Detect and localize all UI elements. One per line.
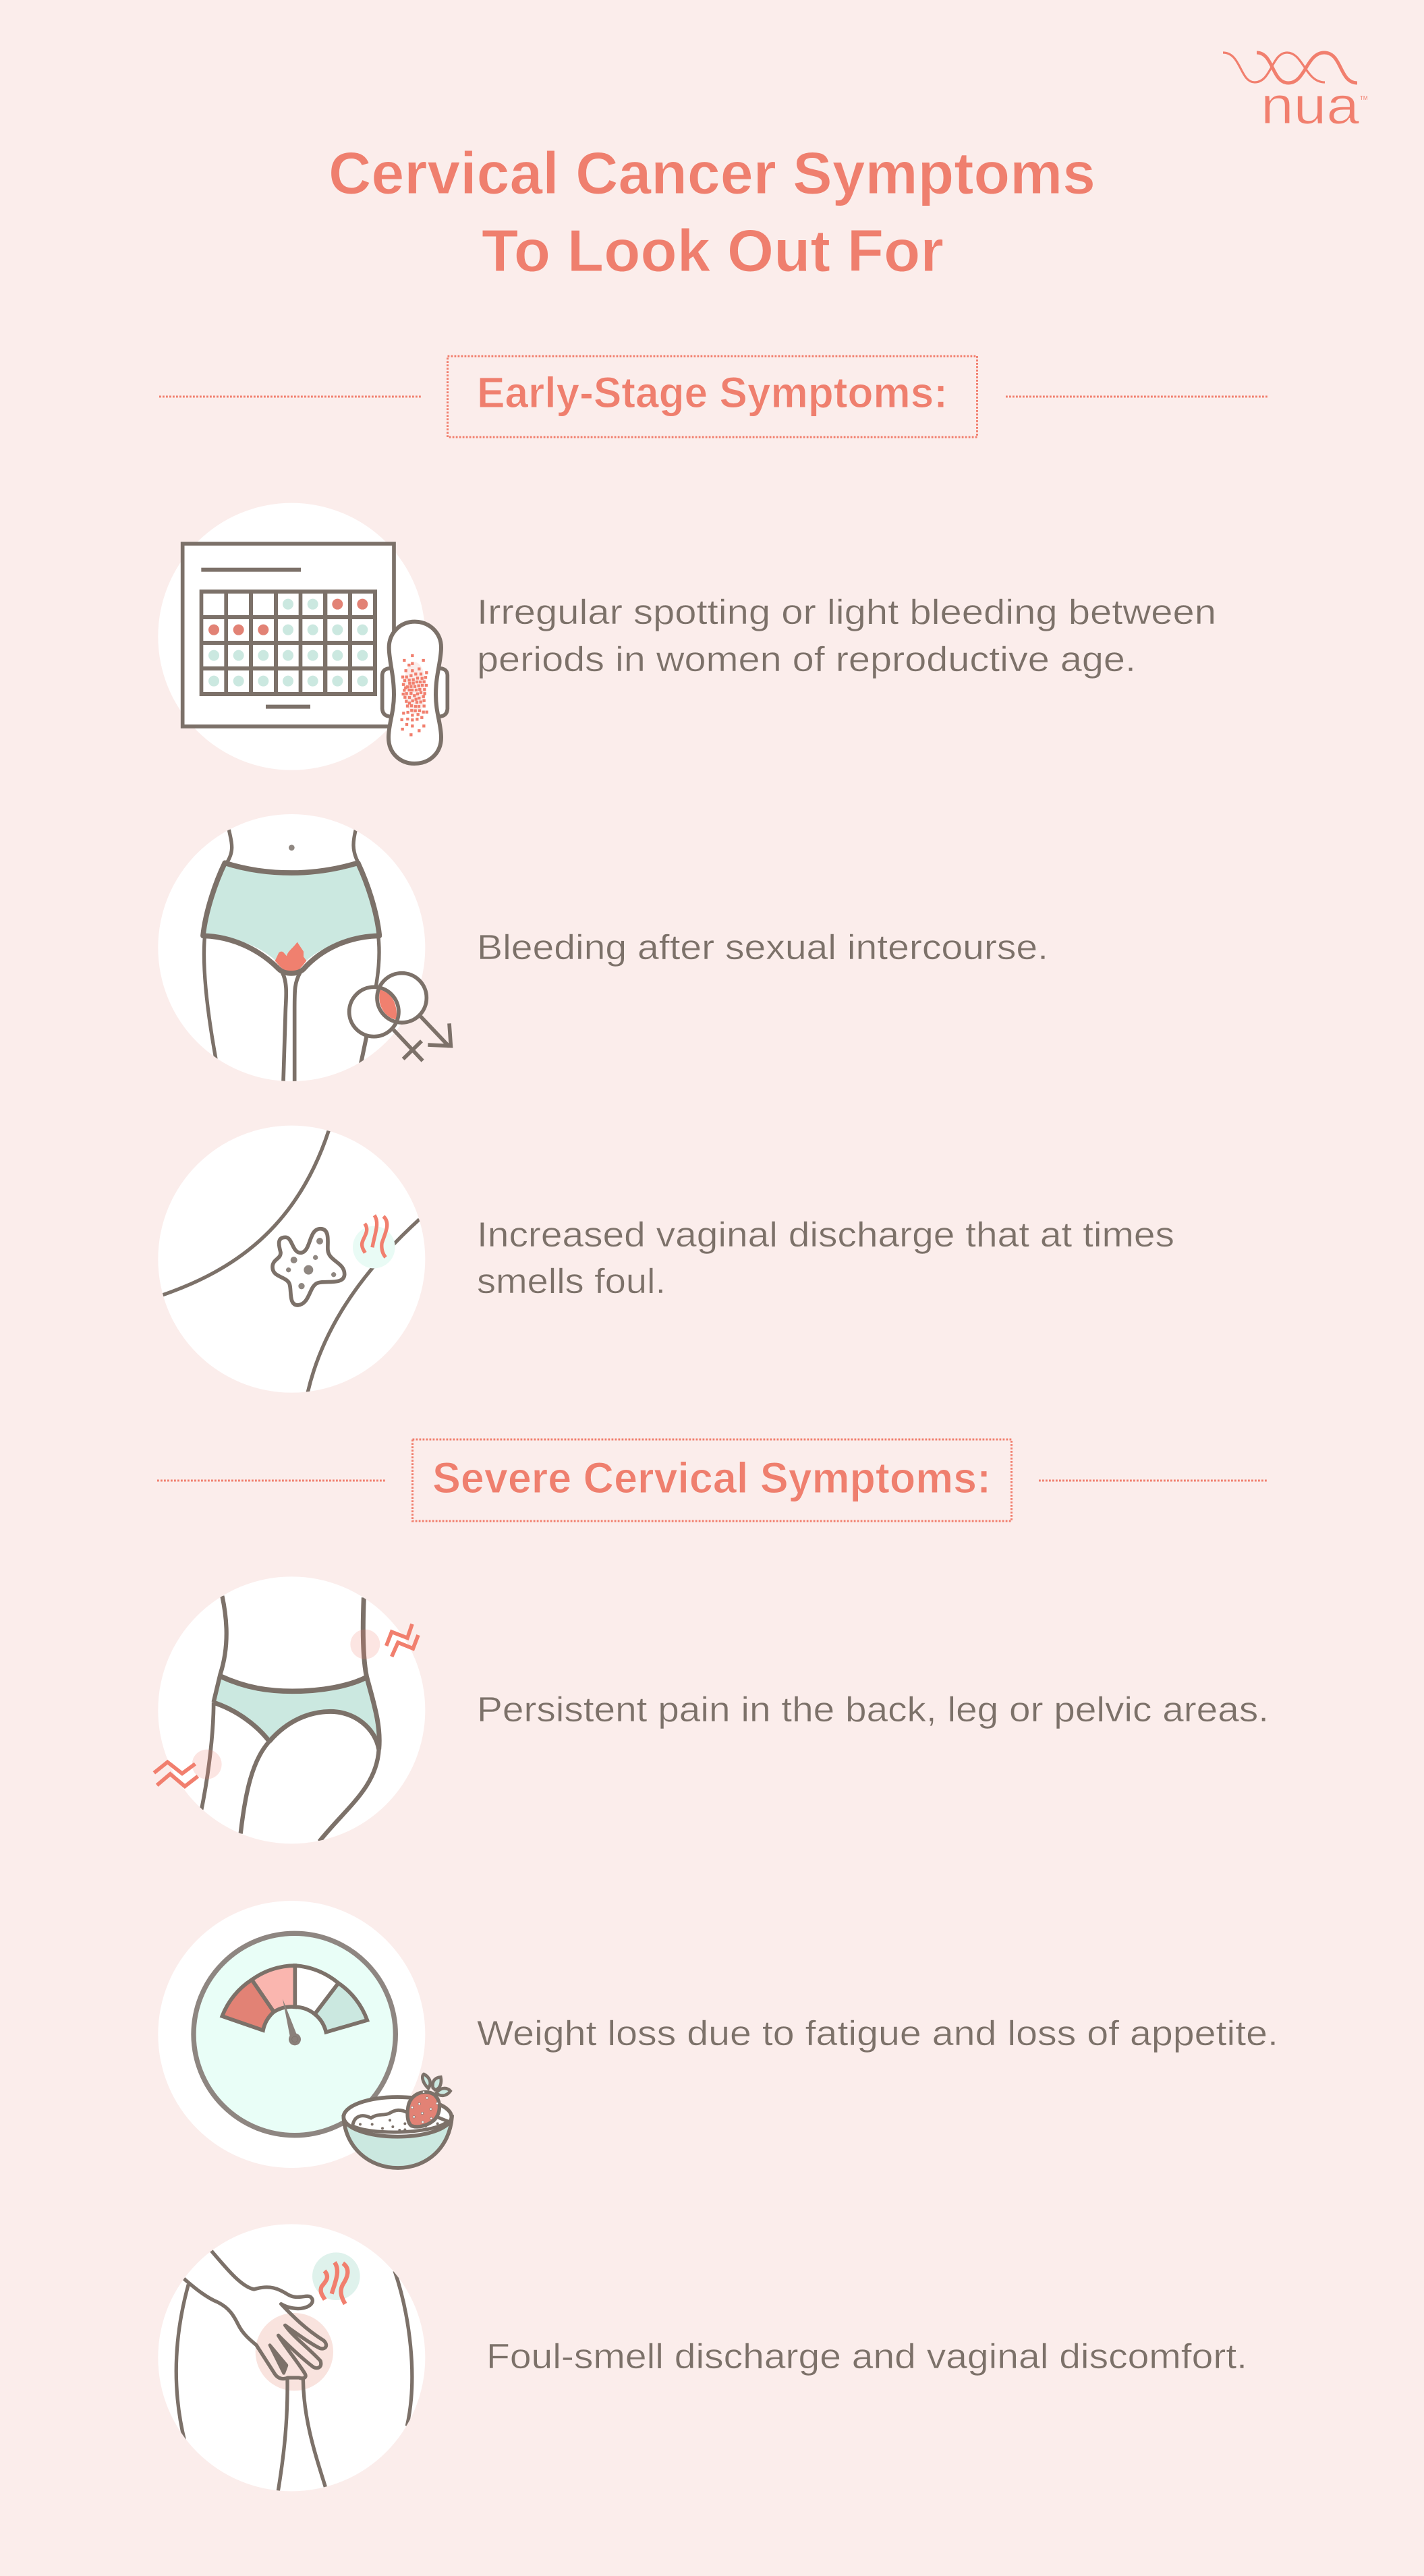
section heading: severe cervical symptoms: Severe Cervical Symptoms:	[432, 1454, 991, 1502]
panel: irregular spotting	[158, 503, 1216, 770]
icon: hips with pain marks	[154, 1576, 425, 1843]
text: persistent pain: Persistent pain in the back, leg or pelvic areas.	[477, 1690, 1269, 1729]
icon: weighing scale and bowl	[158, 1901, 452, 2168]
panel: bleeding after intercourse	[158, 814, 1048, 1081]
section heading: severe cervical symptoms	[157, 1439, 1268, 1521]
icon: underwear and gender symbols	[158, 814, 451, 1081]
icon: discharge and odor	[158, 1126, 425, 1393]
panel: increased discharge	[158, 1126, 1174, 1393]
section heading: early-stage symptoms: Early-Stage Symptoms:	[477, 368, 948, 417]
text: increased discharge: smells foul.	[477, 1262, 666, 1301]
icon: hand over groin with odor	[158, 2224, 425, 2494]
logo: nua	[1223, 53, 1368, 135]
panel: foul-smell discharge	[158, 2224, 1247, 2494]
text: bleeding after intercourse: Bleeding after sexual intercourse.	[477, 928, 1048, 967]
title: To Look Out For	[482, 217, 944, 284]
logo: nua: TM	[1360, 95, 1368, 101]
title: Cervical Cancer Symptoms	[329, 140, 1095, 206]
section heading: early-stage symptoms	[159, 356, 1268, 437]
text: irregular spotting: periods in women of reproductive age.	[477, 640, 1136, 679]
text: weight loss: Weight loss due to fatigue and loss of appetite.	[477, 2014, 1278, 2053]
title	[329, 140, 1095, 284]
text: increased discharge	[477, 1215, 1174, 1301]
text: irregular spotting	[477, 593, 1216, 679]
text: irregular spotting: Irregular spotting or light bleeding between	[477, 593, 1216, 632]
panel: persistent pain	[154, 1576, 1269, 1843]
icon: calendar and sanitary pad	[158, 503, 447, 770]
logo: nua: nua	[1261, 76, 1360, 135]
text: foul-smell discharge: Foul-smell discharge and vaginal discomfort.	[486, 2337, 1247, 2376]
panel: weight loss	[158, 1901, 1278, 2168]
text: increased discharge: Increased vaginal discharge that at times	[477, 1215, 1174, 1255]
